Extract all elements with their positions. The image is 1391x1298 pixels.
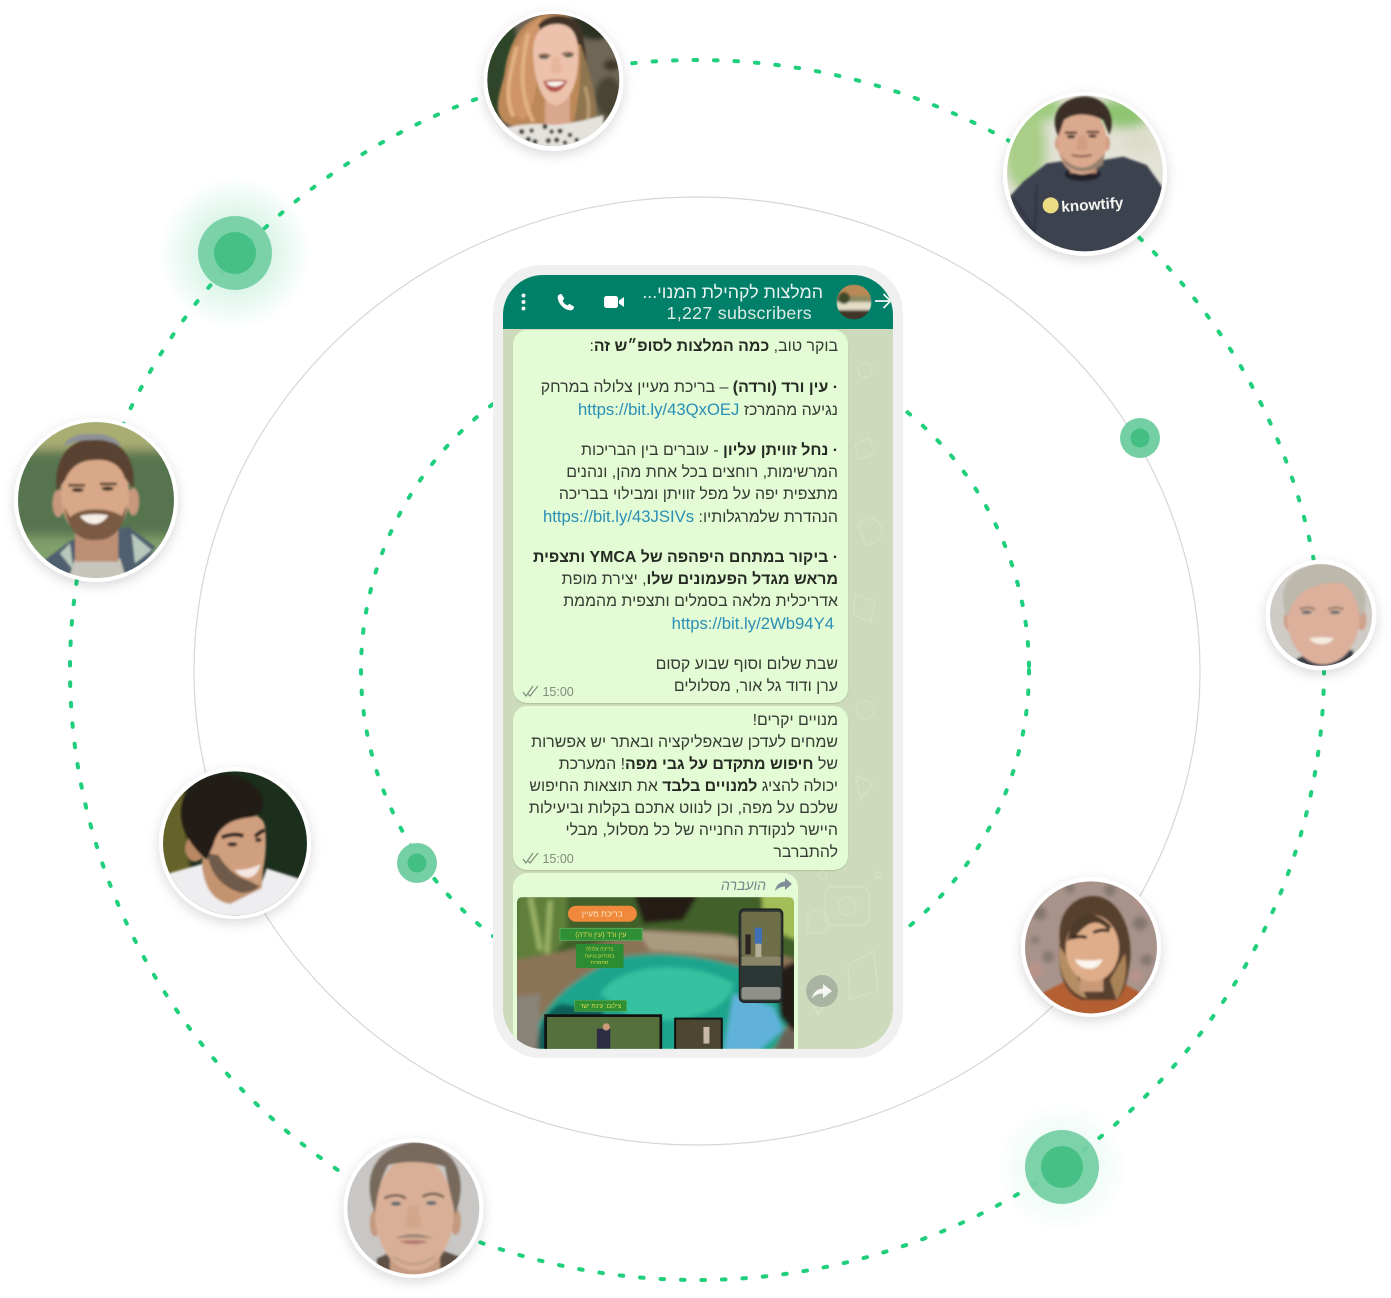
message two text: מנויים יקרים! (753, 712, 838, 729)
message two text: להתברבר (773, 844, 838, 861)
t-shirt logo (1043, 197, 1059, 213)
message two text (529, 712, 838, 861)
call icon (558, 294, 574, 310)
wallpaper doodles (808, 362, 882, 1014)
middle gray ring (194, 197, 1200, 1145)
message one text: בוקר טוב, כמה המלצות לסופ״ש זה: (589, 338, 838, 355)
phone photo inset (739, 909, 783, 1002)
message two text: שמחים לעדכן שבאפליקציה ובאתר יש אפשרות (531, 734, 838, 751)
channel title: המלצות לקהילת המנוי... (642, 282, 823, 302)
forwarded arrow icon (775, 878, 792, 891)
tablet photo inset (675, 1019, 722, 1052)
back arrow icon (875, 293, 891, 309)
message two text: יכולה להציג למנויים בלבד את תוצאות החיפוש (529, 778, 838, 795)
message one text: מראש מגדל הפעמונים שלו, יצירת מופת (562, 571, 838, 588)
message one text: https://bit.ly/2Wb94Y4 (672, 614, 834, 633)
green description label: מהמרכז (591, 960, 609, 966)
message one text: ערן ודוד גל אור, מסלולים (674, 678, 838, 695)
message bubble two (513, 706, 848, 870)
message one text: מתצפית יפה על מפל זוויתן ומבילוי בבריכה (559, 486, 838, 503)
node: small left (397, 843, 437, 883)
inner dashed ring (361, 336, 1029, 1004)
avatar: dark haired man in white shirt (157, 765, 313, 922)
message one text: שבת שלום וסוף שבוע קסום (656, 656, 838, 673)
forwarded label (721, 877, 792, 893)
green description label: במרחק נגיעה (585, 953, 614, 959)
laptop photo inset (546, 1016, 661, 1052)
green description label: בריכה צלולה (586, 946, 614, 953)
green title label: עין ורד (עין ורדה) (575, 930, 627, 939)
message two text: של חיפוש מתקדם על גבי מפה! המערכת (559, 756, 838, 773)
avatar: man in knowtify t-shirt (997, 88, 1177, 262)
avatar: older woman with short grey hair (1266, 560, 1376, 670)
avatar: bearded man with sunglasses on head (8, 413, 188, 587)
menu dots icon (522, 294, 526, 310)
green description label (576, 944, 624, 968)
node: large glowing top left (159, 177, 311, 329)
message two text: היישר לנקודת החנייה של כל מסלול, מבלי (565, 822, 838, 839)
message one text: אדריכלית מלאה בסמלים ותצפית מהממת (563, 593, 838, 610)
message two timestamp (522, 852, 574, 866)
message one text: המרשימות, רוחצים בכל אחת מהן, ונהנים (566, 464, 838, 481)
subscriber count: 1,227 subscribers (667, 303, 812, 323)
avatar: woman with auburn hair (477, 7, 627, 157)
video icon (604, 296, 624, 308)
message one text: הנהדרת שלמרגלותיו: https://bit.ly/43JSIVs (543, 507, 838, 526)
t-shirt wordmark: knowtify (1061, 195, 1124, 216)
green title label (560, 928, 642, 940)
node: large bottom right (996, 1101, 1128, 1233)
message bubble one (513, 330, 848, 703)
message one timestamp: 15:00 (542, 685, 574, 699)
phone mockup (493, 265, 903, 1058)
node: small right (1120, 418, 1160, 458)
message two timestamp: 15:00 (542, 852, 574, 866)
message one text: · ביקור במתחם היפהפה של YMCA ותצפית (533, 549, 838, 566)
orange pill label: בריכת מעיין (582, 908, 623, 918)
chat header bar (503, 275, 893, 329)
message one text: · נחל זוויתן עליון - עוברים בין הבריכות (581, 442, 838, 459)
forwarded message bubble (513, 873, 798, 1063)
channel picture (836, 284, 872, 320)
message two text: שלכם על מפה, וכן לנווט אתכם בקלות וביעילות (529, 800, 838, 817)
message one text: נגיעה מהמרכז https://bit.ly/43QxOEJ (578, 400, 838, 419)
green credit label (575, 1000, 627, 1011)
message one text: · עין ורד (ורדה) – בריכת מעיין צלולה במרחק (541, 379, 838, 396)
avatar: older man with grey hair (344, 1138, 484, 1278)
message one text (533, 338, 838, 695)
forward button (806, 975, 838, 1007)
green credit label: צילום: עינת ישר (580, 1002, 622, 1010)
orange pill label (568, 906, 637, 922)
message one timestamp (522, 685, 574, 699)
forwarded image (517, 897, 794, 1049)
phone screen (503, 275, 893, 1049)
avatar: smiling woman with bangs (1020, 877, 1163, 1020)
forwarded text: הועברה (721, 877, 766, 893)
